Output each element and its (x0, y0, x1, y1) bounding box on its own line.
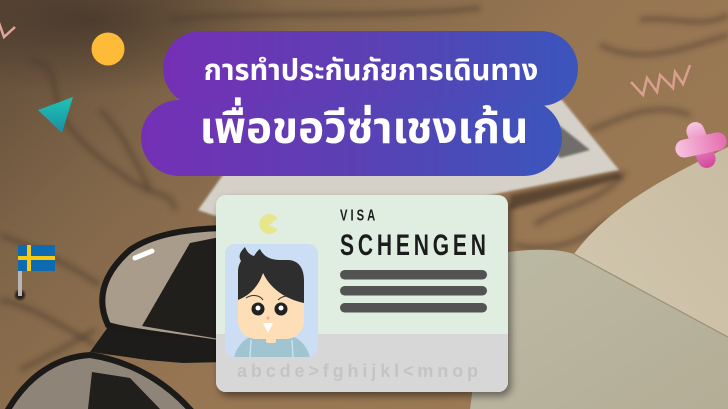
body (234, 335, 310, 357)
notebook (470, 147, 728, 409)
decoration: pink zigzag top right (631, 65, 690, 95)
mouth (263, 323, 273, 333)
machine readable text: abcde>fghijkl<mnop (237, 361, 478, 381)
label: VISA: VISA (340, 205, 378, 224)
decoration: pink cross (674, 119, 728, 171)
decoration: pink zigzag top left (0, 20, 15, 37)
portrait photo (225, 244, 318, 357)
title line 2: เพื่อขอวีซ่าเชงเก้น (200, 97, 528, 153)
glasses (5, 228, 225, 409)
icon: pac-man (259, 214, 278, 234)
title banner (141, 31, 578, 176)
label: SCHENGEN: SCHENGEN (340, 230, 490, 262)
decoration: teal triangle (38, 97, 73, 133)
glasses: lower lens (5, 355, 195, 409)
text lines placeholder (340, 270, 487, 312)
eyes (252, 302, 264, 316)
visa card (216, 195, 508, 392)
title line 1: การทำประกันภัยการเดินทาง (204, 55, 538, 87)
title pill: top (163, 31, 578, 106)
flag: Sweden (15, 245, 55, 300)
glasses: upper lens (102, 228, 225, 344)
card bottom strip (216, 334, 508, 392)
paper documents behind card (198, 95, 622, 216)
decoration: yellow circle (92, 32, 124, 66)
nose (266, 316, 270, 320)
title pill: bottom (141, 100, 562, 176)
hair (238, 247, 304, 303)
face (238, 270, 304, 339)
glasses: bridge and lower frame (90, 327, 225, 363)
